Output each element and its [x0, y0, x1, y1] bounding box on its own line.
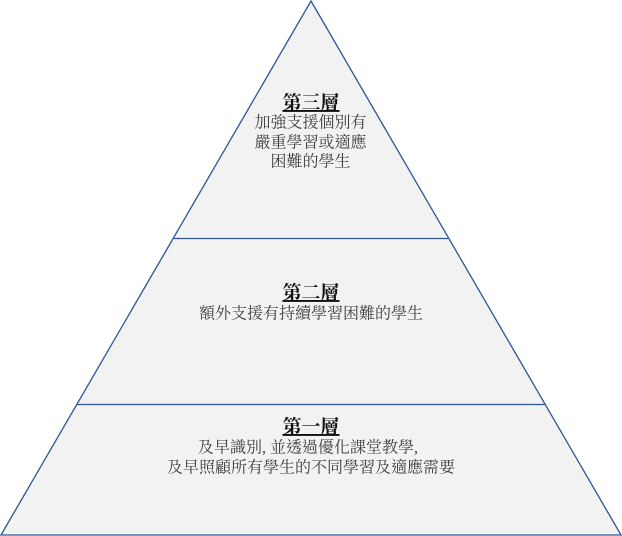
tier 1 text: [167, 416, 455, 476]
tier 3 text: [254, 92, 367, 170]
tier 1 description: 及早識別, 並透過優化課堂教學,: [198, 438, 418, 456]
tier 2 description: 額外支援有持續學習困難的學生: [199, 304, 423, 322]
tier 3 description: [254, 114, 367, 170]
tier 3 heading: 第三層: [282, 92, 340, 114]
tier 3 description: 困難的學生: [270, 152, 351, 170]
tier 1 description: 及早照顧所有學生的不同學習及適應需要: [167, 458, 455, 476]
tier 2 text: [199, 282, 423, 322]
tier 3 description: 嚴重學習或適應: [254, 134, 367, 152]
tier 2 heading: 第二層: [282, 282, 340, 304]
tier 1 description: [167, 438, 455, 476]
tier 1 heading: 第一層: [282, 416, 340, 438]
tier 3 description: 加強支援個別有: [254, 114, 367, 132]
